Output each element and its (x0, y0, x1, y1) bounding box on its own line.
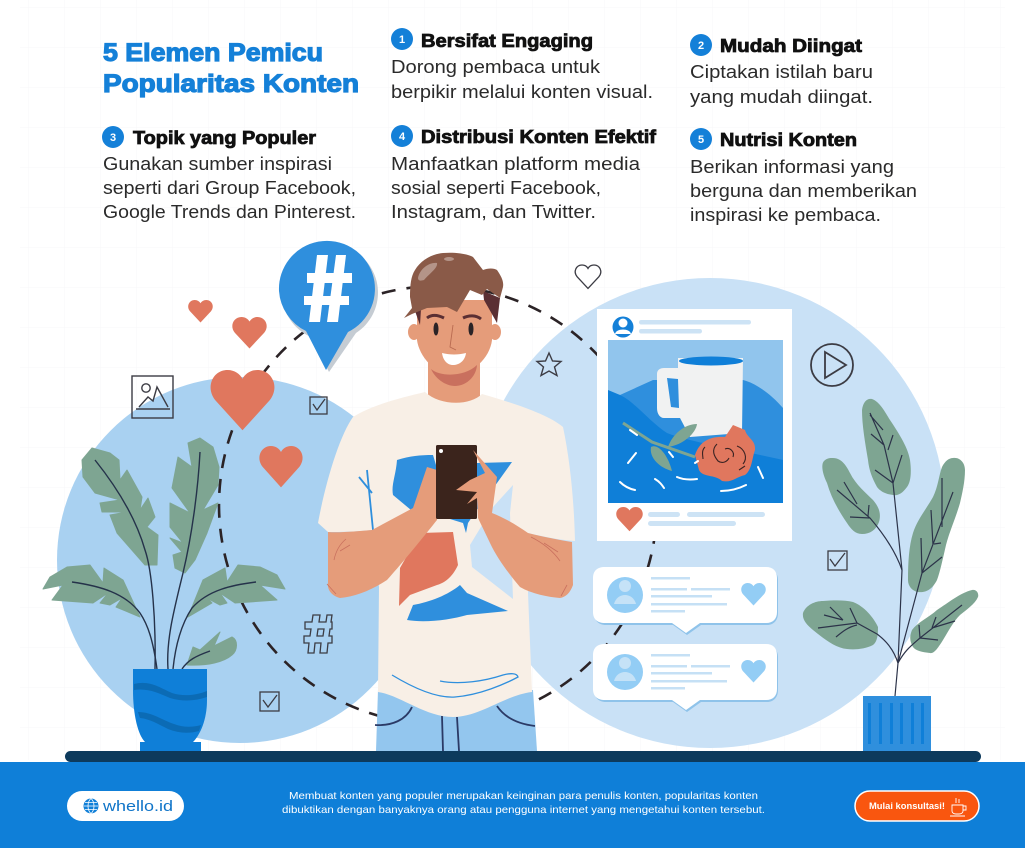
left potted plant (43, 438, 285, 752)
icon: big heart (211, 370, 274, 430)
item 4: Distribusi Konten Efektif (391, 125, 657, 222)
item 1: Bersifat Engaging: Bersifat Engaging (421, 31, 593, 51)
item 2: Mudah Diingat: Mudah Diingat (720, 36, 862, 56)
item 5: Nutrisi Konten: 5 (698, 134, 704, 146)
pants (375, 690, 537, 751)
icon: image frame (132, 376, 173, 418)
phone (436, 445, 477, 519)
hashtag bubble (279, 241, 378, 372)
item 3: Topik yang Populer: Google Trends dan Pinterest. (103, 202, 356, 222)
left background circle (57, 377, 423, 743)
icon: play button (811, 344, 853, 386)
title: Popularitas Konten (103, 70, 359, 98)
item 1: Bersifat Engaging: berpikir melalui konten visual. (391, 82, 653, 102)
consult button: Mulai konsultasi! (869, 801, 945, 812)
item 5: Nutrisi Konten: Berikan informasi yang (690, 157, 894, 177)
item 3: Topik yang Populer: Gunakan sumber inspirasi (103, 154, 332, 174)
title: 5 Elemen Pemicu (103, 39, 323, 67)
item 2: Mudah Diingat: yang mudah diingat. (690, 87, 873, 107)
item 4: Distribusi Konten Efektif: Distribusi Konten Efektif (421, 127, 657, 147)
icon: small heart top (188, 300, 213, 322)
floor bar (65, 751, 981, 762)
icon: checkbox bottom (260, 692, 279, 711)
item 5: Nutrisi Konten: inspirasi ke pembaca. (690, 205, 881, 225)
right potted plant (803, 399, 978, 751)
title (103, 39, 359, 98)
comment card 2 (593, 644, 778, 712)
footer text: Membuat konten yang populer merupakan keinginan para penulis konten, popularitas konten (289, 790, 758, 802)
item 1: Bersifat Engaging (391, 28, 653, 102)
item 4: Distribusi Konten Efektif: Instagram, dan Twitter. (391, 202, 596, 222)
item 2: Mudah Diingat: Ciptakan istilah baru (690, 62, 873, 82)
item 3: Topik yang Populer: seperti dari Group Facebook, (103, 178, 356, 198)
dashed orbit (219, 286, 657, 724)
man (318, 253, 575, 751)
head (404, 253, 503, 386)
icon: checkbox right (828, 551, 847, 570)
comment card 1 (593, 567, 778, 635)
right background circle (475, 278, 945, 748)
item 3: Topik yang Populer (102, 126, 356, 222)
item 3: Topik yang Populer: Topik yang Populer (133, 128, 316, 148)
item 5: Nutrisi Konten: Nutrisi Konten (720, 130, 857, 150)
arms (328, 467, 437, 598)
item 5: Nutrisi Konten: berguna dan memberikan (690, 181, 917, 201)
post image: mug and rose (608, 340, 783, 503)
whello logo pill: whello.id (102, 798, 173, 815)
icon: outlined hash (304, 615, 332, 653)
icon: outlined heart (575, 265, 601, 288)
item 4: Distribusi Konten Efektif: sosial seperti Facebook, (391, 178, 601, 198)
item 4: Distribusi Konten Efektif: 4 (399, 131, 406, 143)
post avatar (612, 316, 634, 338)
item 2: Mudah Diingat: 2 (698, 40, 704, 52)
whello logo pill (67, 791, 184, 821)
neck (428, 350, 480, 407)
post card (597, 309, 792, 541)
footer text: dibuktikan dengan banyaknya orang atau pengguna internet yang mengetahui konten tersebut. (282, 804, 765, 816)
item 2: Mudah Diingat (690, 34, 873, 107)
item 4: Distribusi Konten Efektif: Manfaatkan platform media (391, 154, 641, 174)
footer text (282, 790, 765, 816)
footer band (0, 762, 1025, 848)
consult button (855, 791, 979, 821)
icon: medium heart (232, 317, 267, 348)
shirt (318, 392, 575, 717)
icon: outlined star (537, 353, 561, 376)
item 1: Bersifat Engaging: Dorong pembaca untuk (391, 57, 601, 77)
item 1: Bersifat Engaging: 1 (399, 34, 405, 46)
item 3: Topik yang Populer: 3 (110, 132, 116, 144)
icon: checkbox top (310, 397, 327, 414)
item 5: Nutrisi Konten (690, 128, 917, 225)
icon: lower heart (259, 446, 303, 487)
shirt print (359, 455, 518, 697)
